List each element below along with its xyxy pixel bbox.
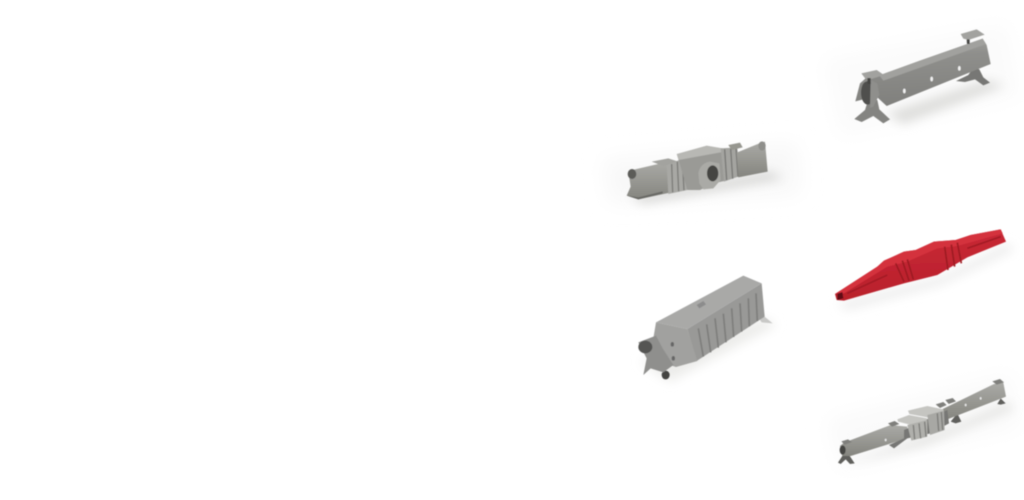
product: rail cover with two clamps (top right) bbox=[823, 23, 1020, 137]
product: red cover (right middle) bbox=[835, 229, 1014, 310]
product: finned enclosure (lower middle) bbox=[638, 276, 777, 382]
product: long rail with central housing (bottom right) bbox=[827, 373, 1021, 470]
product: rail with finned central housing (middle) bbox=[603, 141, 800, 203]
